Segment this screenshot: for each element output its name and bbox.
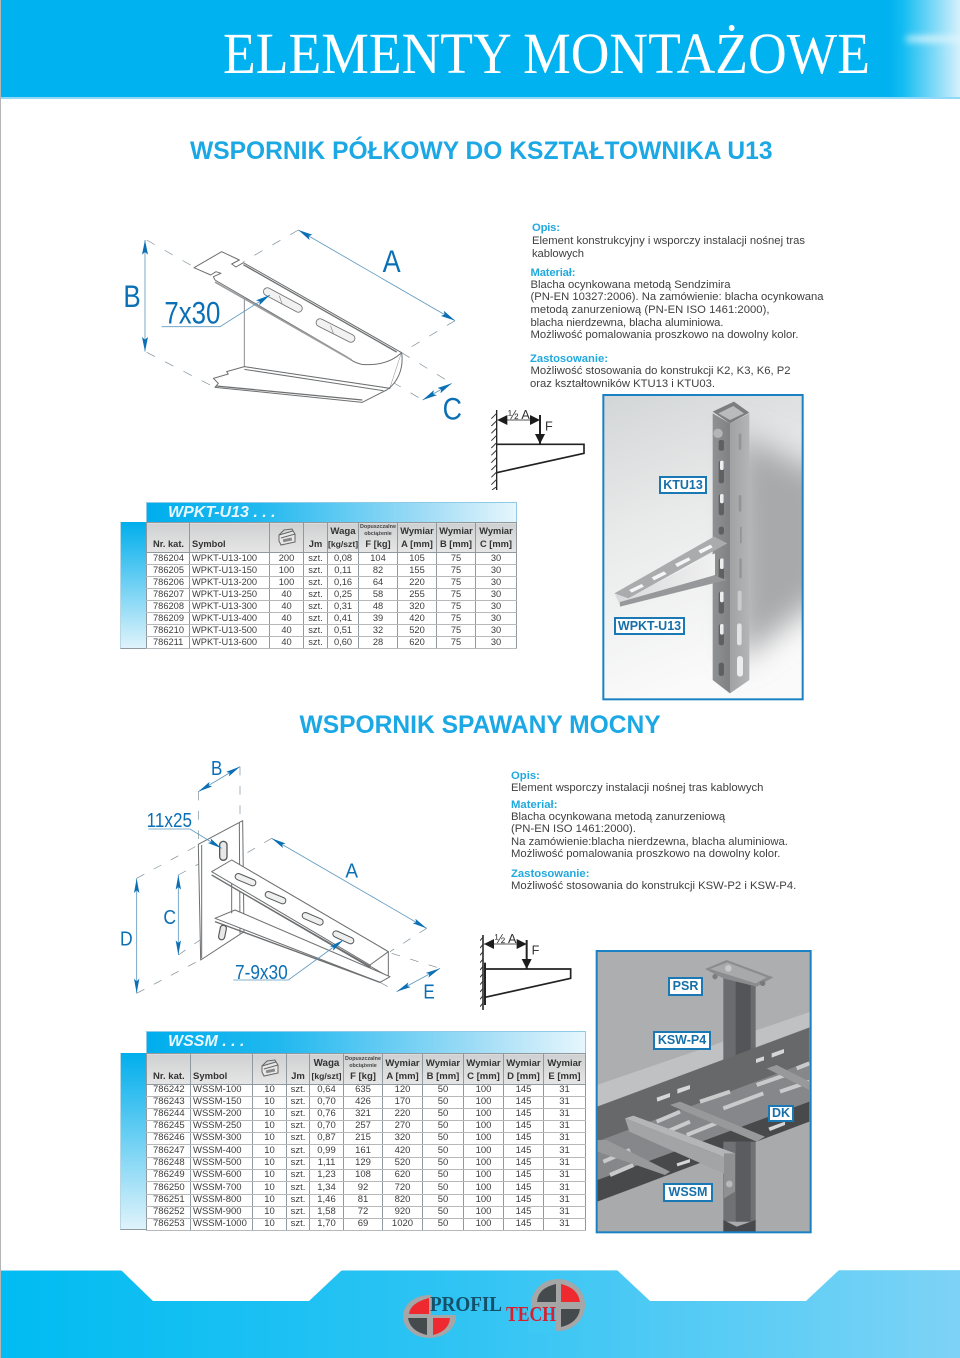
data grid: 75 <box>451 565 461 575</box>
data grid: 786210 <box>153 625 184 635</box>
data grid: 0,08 <box>334 553 352 563</box>
load diagram: section 2: F <box>532 944 540 958</box>
data grid: 75 <box>451 625 461 635</box>
data grid: 82 <box>373 565 383 575</box>
description: section 1: Opis: <box>532 222 560 234</box>
tag: KTU13 <box>659 476 707 494</box>
data grid: 40 <box>281 637 292 647</box>
product photo: KTU13 with WPKT-U13 <box>602 394 804 700</box>
data grid: 0,99 <box>317 1144 336 1156</box>
data grid: 420 <box>409 613 425 623</box>
data grid: Wymiar <box>479 526 513 536</box>
description: section 2: Materiał: <box>511 799 557 811</box>
data grid: Waga <box>314 1058 339 1069</box>
data grid: C [mm] <box>467 1071 500 1082</box>
description: section 1: Możliwość pomalowania proszkowo na dowolny kolor. <box>530 329 798 341</box>
data grid: 145 <box>516 1182 531 1192</box>
data grid: obciążenie <box>364 531 392 537</box>
data grid: 40 <box>281 589 292 599</box>
heading: section 2: WSPORNIK SPAWANY MOCNY <box>300 712 661 739</box>
data grid: 720 <box>395 1182 410 1192</box>
data grid: 520 <box>409 625 425 635</box>
data grid: Dopuszczalne <box>345 1056 381 1062</box>
data grid: B [mm] <box>427 1071 459 1082</box>
description: section 2: Blacha ocynkowana metodą zanurzeniową <box>511 811 726 823</box>
data grid: 30 <box>491 577 501 587</box>
data grid: 10 <box>264 1182 275 1192</box>
data grid: 100 <box>476 1182 491 1192</box>
tag: WPKT-U13 <box>614 617 685 635</box>
label: C: C <box>163 907 176 929</box>
data grid: 64 <box>373 577 383 587</box>
label: B: B <box>123 279 141 314</box>
data grid: WPKT-U13-100 <box>192 553 257 563</box>
description: section 1: metodą zanurzeniową (PN-EN ISO 1461:2000), <box>530 304 770 316</box>
data grid: 100 <box>279 565 294 575</box>
data grid: szt. <box>308 613 323 623</box>
logo: Profil Tech <box>403 1279 585 1338</box>
data grid: WPKT-U13-250 <box>192 589 257 599</box>
data grid: [kg/szt] <box>328 539 358 549</box>
data grid: 0,60 <box>334 637 352 647</box>
data grid: 30 <box>491 625 501 635</box>
description: section 1: Element konstrukcyjny i wsporczy instalacji nośnej tras <box>532 235 805 247</box>
data grid: 786211 <box>153 637 183 647</box>
data grid: A [mm] <box>401 539 433 549</box>
data grid: WPKT-U13-200 <box>192 577 257 587</box>
data grid: 75 <box>451 601 461 611</box>
data grid: 10 <box>264 1144 275 1156</box>
data grid: szt. <box>308 637 323 647</box>
tag: WSSM <box>663 1183 713 1202</box>
data grid: 786204 <box>153 553 184 563</box>
data grid: Wymiar <box>400 526 434 536</box>
data grid: 0,31 <box>334 601 352 611</box>
tag: KSW-P4 <box>653 1031 711 1050</box>
description: section 1: Zastosowanie: <box>530 353 608 365</box>
description: section 1: oraz kształtowników KTU13 i KTU03. <box>530 378 715 390</box>
side strip <box>120 522 146 649</box>
page left edge line <box>0 0 1 1358</box>
load diagram: section 1 <box>491 408 585 490</box>
load diagram: section 2 <box>480 932 572 1010</box>
data grid: 0,11 <box>334 565 352 575</box>
data grid: 30 <box>491 553 501 563</box>
data grid: 30 <box>491 637 501 647</box>
description: section 1: (PN-EN 10327:2006). Na zamówienie: blacha ocynkowana <box>530 291 824 303</box>
data grid: 200 <box>279 553 294 563</box>
data grid: 100 <box>279 577 294 587</box>
data grid: F [kg] <box>365 539 391 549</box>
data grid: 50 <box>438 1144 448 1156</box>
table title band <box>146 502 517 523</box>
data grid: 155 <box>409 565 425 575</box>
data grid: szt. <box>308 601 323 611</box>
icon: box <box>278 528 296 546</box>
data grid: A [mm] <box>386 1071 419 1082</box>
data grid: WPKT-U13-500 <box>192 625 257 635</box>
data grid: 75 <box>451 589 461 599</box>
data grid: Symbol <box>193 1071 227 1082</box>
data grid: Wymiar <box>547 1058 582 1069</box>
table: WSSM <box>120 1031 586 1231</box>
description: section 2: Opis: <box>511 770 540 782</box>
data grid: 786205 <box>153 565 184 575</box>
data grid: Wymiar <box>426 1058 460 1069</box>
data grid: 30 <box>491 589 501 599</box>
data grid: Wymiar <box>385 1058 420 1069</box>
data grid: B [mm] <box>440 539 472 549</box>
data grid: Jm <box>309 539 322 549</box>
description: section 2: Element wsporczy instalacji nośnej tras kablowych <box>511 782 763 794</box>
data grid: WPKT-U13-300 <box>192 601 257 611</box>
data grid: Nr. kat. <box>153 539 184 549</box>
data grid: 620 <box>409 637 425 647</box>
description: section 1: Materiał: <box>530 267 576 279</box>
data grid: WPKT-U13-400 <box>192 613 257 623</box>
label: B: B <box>211 758 222 780</box>
data grid: 32 <box>373 625 383 635</box>
data grid: WPKT-U13-150 <box>192 565 257 575</box>
footer banner <box>1 1270 960 1358</box>
data grid: Wymiar <box>439 526 473 536</box>
data grid: szt. <box>308 553 323 563</box>
description: section 1: Możliwość stosowania do konstrukcji K2, K3, K6, P2 <box>530 365 790 377</box>
data grid: D [mm] <box>507 1071 540 1082</box>
load diagram: section 1: F <box>545 420 553 434</box>
table title band: WSSM . . . <box>168 1033 244 1050</box>
icon: box <box>262 1060 278 1077</box>
load diagram: section 1: ½ A <box>508 408 530 422</box>
product photo: KSW-P4 with WSSM <box>596 950 812 1234</box>
data grid: 786247 <box>153 1144 185 1156</box>
data grid: 92 <box>358 1182 368 1192</box>
label: D: D <box>120 928 133 950</box>
data grid: 161 <box>355 1144 371 1156</box>
tag: PSR: PSR <box>673 979 698 993</box>
data grid: 48 <box>373 601 383 611</box>
data grid: Nr. kat. <box>153 1071 185 1082</box>
data grid <box>146 1053 586 1231</box>
data grid: [kg/szt] <box>311 1071 342 1081</box>
data grid: 28 <box>373 637 383 647</box>
data grid: 0,41 <box>334 613 352 623</box>
data grid: F [kg] <box>350 1071 376 1082</box>
data grid: 58 <box>373 589 383 599</box>
heading: section 1: WSPORNIK PÓŁKOWY DO KSZTAŁTOWNIKA U13 <box>190 138 773 165</box>
table: WPKT-U13 <box>120 502 517 649</box>
logo text: TECH: TECH <box>506 1302 556 1326</box>
data grid: 320 <box>409 601 425 611</box>
tag: KTU13: KTU13 <box>663 478 703 492</box>
data grid: 39 <box>373 613 383 623</box>
description: section 2: Możliwość stosowania do konstrukcji KSW-P2 i KSW-P4. <box>511 880 796 892</box>
data grid: Dopuszczalne <box>360 524 396 530</box>
data grid: szt. <box>308 625 323 635</box>
data grid: Wymiar <box>506 1058 541 1069</box>
data grid: 0,51 <box>334 625 352 635</box>
label: E: E <box>423 981 435 1003</box>
data grid: 786250 <box>153 1182 185 1192</box>
data grid: C [mm] <box>480 539 512 549</box>
tag: DK: DK <box>772 1106 790 1120</box>
data grid: 420 <box>395 1144 410 1156</box>
tag: WSSM: WSSM <box>669 1185 707 1199</box>
data grid: WSSM-700 <box>193 1182 242 1192</box>
data grid: szt. <box>291 1144 305 1156</box>
label: A: A <box>345 860 359 882</box>
data grid: 145 <box>516 1144 531 1156</box>
data grid: 40 <box>281 625 292 635</box>
data grid: Waga <box>330 526 356 537</box>
description: section 2: Na zamówienie:blacha nierdzewna, blacha aluminiowa. <box>511 836 788 848</box>
data grid: 75 <box>451 553 461 563</box>
description: section 1: kablowych <box>532 248 584 260</box>
side strip <box>120 1053 146 1230</box>
data grid: 786206 <box>153 577 184 587</box>
data grid: E [mm] <box>548 1071 581 1082</box>
data grid: 104 <box>370 553 386 563</box>
description: section 2: Zastosowanie: <box>511 868 589 880</box>
label: 7-9x30: 7-9x30 <box>235 962 288 984</box>
data grid: 30 <box>491 565 501 575</box>
description: section 2 <box>511 770 796 892</box>
data grid: 30 <box>491 601 501 611</box>
data grid: 220 <box>409 577 425 587</box>
technical drawing: U13 bracket <box>123 230 462 426</box>
data grid: 40 <box>281 613 292 623</box>
header banner <box>1 0 960 99</box>
data grid: Jm <box>291 1071 305 1082</box>
data grid: szt. <box>308 565 323 575</box>
data grid: WPKT-U13-600 <box>192 637 257 647</box>
data grid: 786208 <box>153 601 184 611</box>
tag: PSR <box>668 977 703 996</box>
title: ELEMENTY MONTAŻOWE <box>223 21 870 86</box>
tag: WPKT-U13: WPKT-U13 <box>618 619 681 633</box>
data grid: 40 <box>281 601 292 611</box>
description: section 2: (PN-EN ISO 1461:2000). <box>511 823 636 835</box>
data grid: szt. <box>308 589 323 599</box>
data grid: 786209 <box>153 613 184 623</box>
data grid: 0,16 <box>334 577 352 587</box>
data grid <box>146 522 517 649</box>
description: section 1 <box>530 222 824 390</box>
label: 7x30: 7x30 <box>164 295 220 330</box>
description: section 1: Blacha ocynkowana metodą Sendzimira <box>530 279 731 291</box>
load diagram: section 2: ½ A <box>495 932 517 946</box>
logo text: PROFIL: PROFIL <box>430 1292 502 1316</box>
data grid: 100 <box>476 1144 491 1156</box>
tag: KSW-P4: KSW-P4 <box>658 1033 706 1047</box>
data grid: Symbol <box>192 539 226 549</box>
data grid: 105 <box>409 553 425 563</box>
data grid: szt. <box>291 1182 305 1192</box>
tag: DK <box>768 1105 794 1122</box>
data grid: 30 <box>491 613 501 623</box>
data grid: 75 <box>451 637 461 647</box>
label: 11x25: 11x25 <box>147 810 192 832</box>
data grid: 0,25 <box>334 589 352 599</box>
table title band: WPKT-U13 . . . <box>168 504 276 521</box>
description: section 1: blacha nierdzewna, blacha aluminiowa. <box>530 317 724 329</box>
data grid: Wymiar <box>466 1058 501 1069</box>
data grid: 75 <box>451 613 461 623</box>
data grid: 31 <box>559 1182 570 1192</box>
data grid: 50 <box>438 1182 448 1192</box>
data grid: 1,34 <box>317 1182 336 1192</box>
table title band <box>146 1031 586 1053</box>
technical drawing: WSSM bracket <box>120 758 440 1003</box>
data grid: szt. <box>308 577 323 587</box>
data grid: 786207 <box>153 589 184 599</box>
label: C: C <box>443 391 462 426</box>
data grid: WSSM-400 <box>193 1144 242 1156</box>
data grid: 255 <box>409 589 425 599</box>
description: section 2: Możliwość pomalowania proszkowo na dowolny kolor. <box>511 848 780 860</box>
data grid: 75 <box>451 577 461 587</box>
label: A: A <box>383 244 401 279</box>
data grid: 31 <box>559 1144 570 1156</box>
data grid: obciążenie <box>349 1063 377 1069</box>
